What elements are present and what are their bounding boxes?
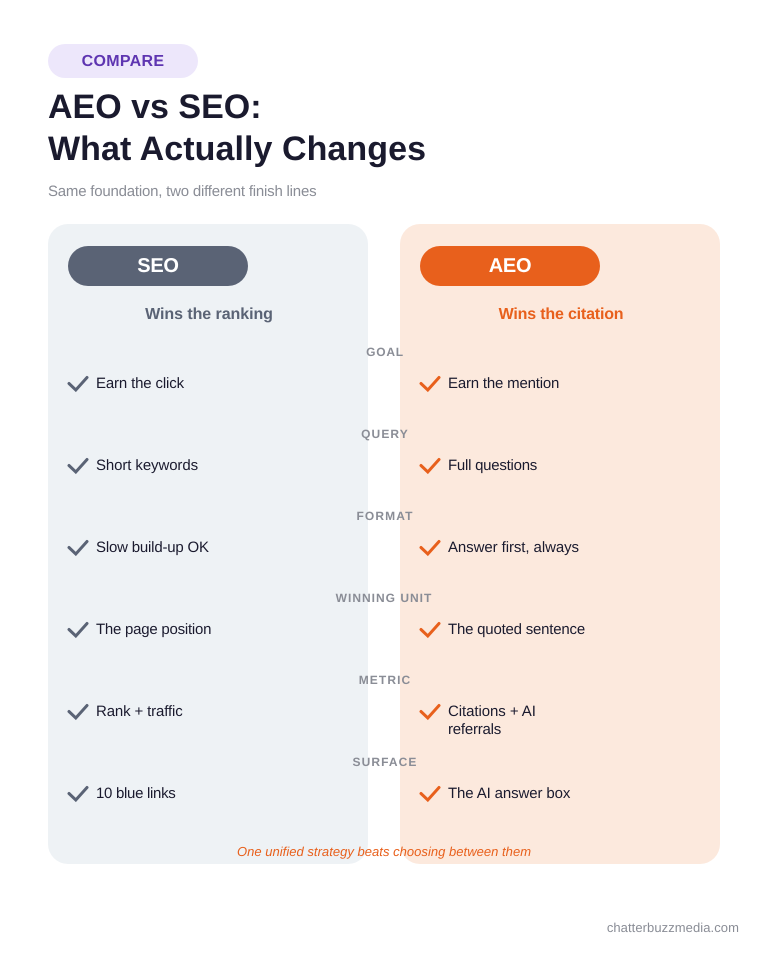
SEO query text: Short keywords (96, 457, 198, 474)
SEO pill (68, 246, 248, 286)
SEO goal text: Earn the click (96, 375, 184, 392)
AEO surface text: The AI answer box (448, 785, 570, 802)
AEO pill: AEO (489, 255, 531, 277)
footer source: chatterbuzzmedia.com (607, 920, 739, 935)
icon: AEO check (419, 376, 441, 392)
label: goal: GOAL (366, 345, 404, 359)
AEO metric text (448, 703, 536, 738)
AEO query text: Full questions (448, 457, 537, 474)
label: format: FORMAT (356, 509, 414, 523)
AEO metric text: Citations + AI (448, 703, 536, 720)
panel: SEO (48, 224, 368, 864)
panel: AEO (400, 224, 720, 864)
label: winning unit: WINNING UNIT (336, 591, 432, 605)
icon: SEO check (67, 704, 89, 720)
label: surface: SURFACE (352, 755, 418, 769)
AEO format text: Answer first, always (448, 539, 579, 556)
icon: SEO check (67, 622, 88, 638)
closing note: One unified strategy beats choosing between them (237, 844, 531, 859)
title: What Actually Changes (48, 130, 426, 168)
AEO metric text: referrals (448, 721, 501, 738)
SEO tagline: Wins the ranking (145, 306, 273, 323)
SEO pill: SEO (137, 255, 179, 277)
icon: SEO check (67, 458, 89, 474)
AEO winning unit text: The quoted sentence (448, 621, 585, 638)
category pill: COMPARE (82, 53, 164, 70)
SEO surface text: 10 blue links (96, 785, 176, 802)
AEO pill (420, 246, 600, 286)
icon: AEO check (419, 622, 441, 638)
icon: SEO check (67, 786, 89, 802)
label: query: QUERY (361, 427, 409, 441)
SEO format text: Slow build-up OK (96, 539, 209, 556)
subtitle: Same foundation, two different finish lines (48, 183, 316, 200)
SEO winning unit text: The page position (96, 621, 211, 638)
SEO metric text: Rank + traffic (96, 703, 183, 720)
icon: AEO check (419, 786, 441, 802)
icon: SEO check (67, 376, 88, 392)
title (48, 88, 426, 168)
title: AEO vs SEO: (48, 88, 262, 126)
icon: SEO check (67, 540, 89, 556)
label: metric: METRIC (359, 673, 411, 687)
AEO tagline: Wins the citation (499, 306, 623, 323)
icon: AEO check (419, 540, 441, 556)
icon: AEO check (419, 704, 441, 720)
icon: AEO check (419, 458, 441, 474)
category pill (48, 44, 198, 78)
AEO goal text: Earn the mention (448, 375, 559, 392)
